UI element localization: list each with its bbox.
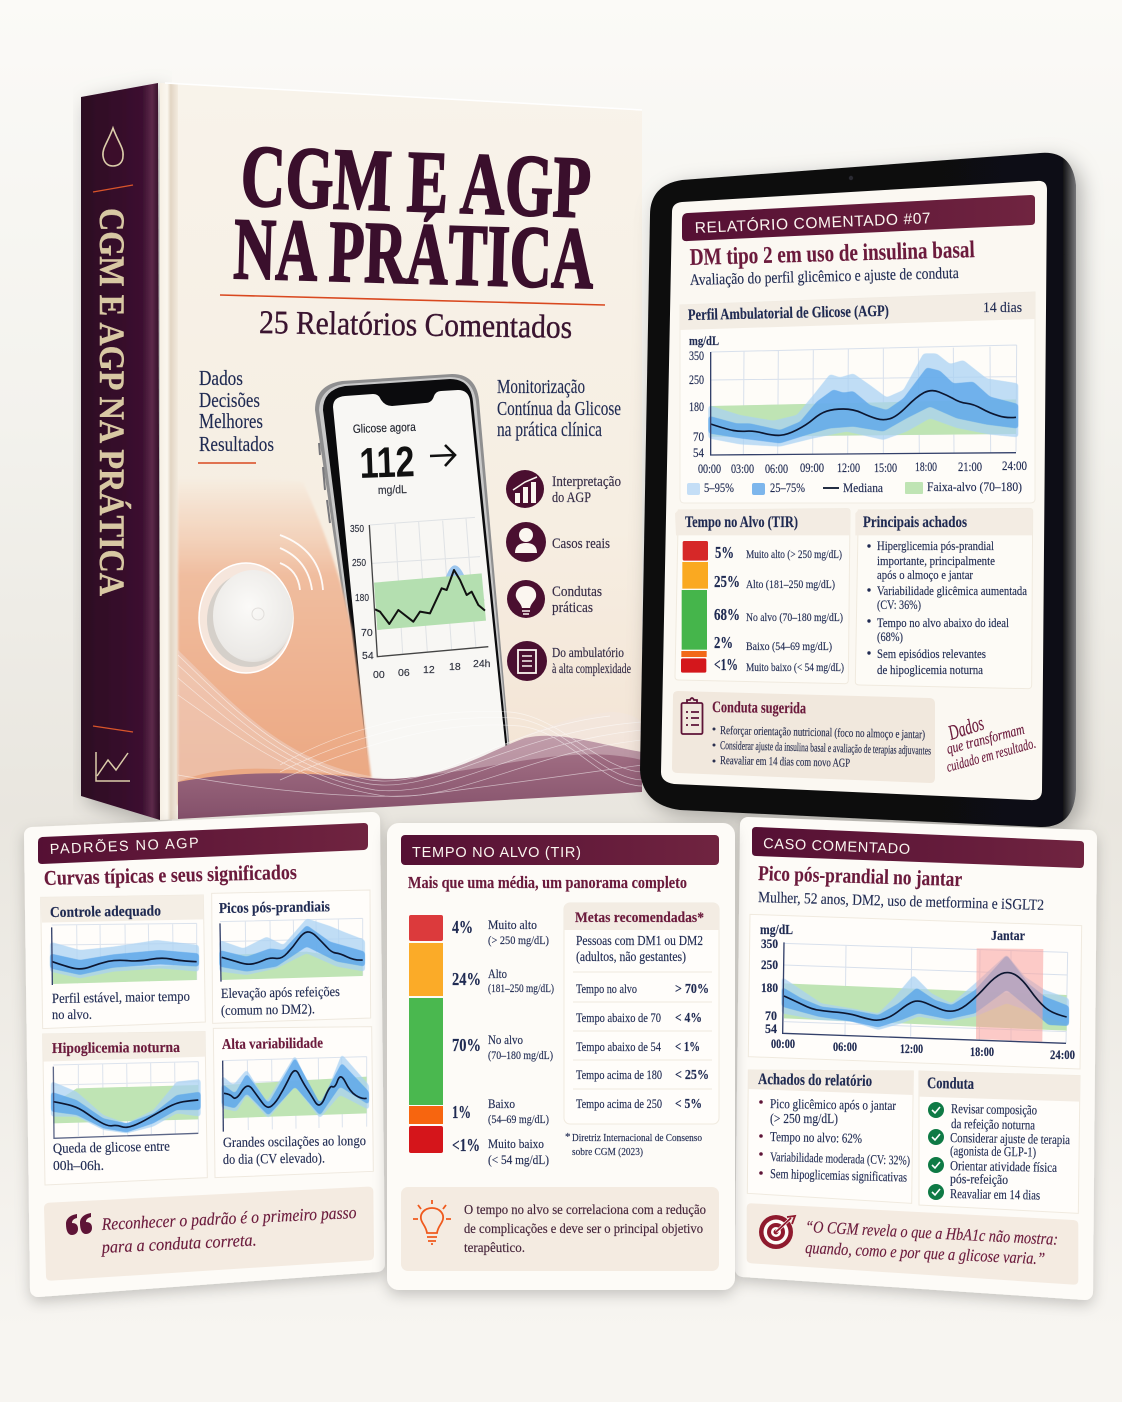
card header banner bbox=[401, 835, 719, 865]
AGP chart: 06:00 bbox=[765, 462, 788, 476]
case findings panel bbox=[747, 1070, 913, 1203]
feature list bbox=[506, 470, 631, 681]
phone chart: 180 bbox=[355, 592, 369, 604]
case quote panel: quando, como e por que a glicose varia.” bbox=[805, 1238, 1045, 1268]
card: case report bbox=[743, 825, 1089, 1292]
case chart panel: 70 bbox=[765, 1009, 777, 1023]
phone chart: 250 bbox=[352, 557, 366, 569]
insight panel bbox=[401, 1187, 719, 1271]
pattern: high variability: do dia (CV elevado). bbox=[223, 1151, 325, 1168]
card header banner bbox=[38, 823, 368, 864]
TIR panel: Muito baixo (< 54 mg/dL) bbox=[746, 660, 844, 674]
phone reading: 112 bbox=[359, 438, 415, 488]
AGP legend: Faixa-alvo (70–180) bbox=[927, 479, 1022, 494]
case conduct panel: da refeição noturna bbox=[951, 1116, 1035, 1132]
TIR values: 4% bbox=[452, 917, 473, 937]
TIR values: Alto bbox=[488, 966, 507, 981]
icon: quotation mark bbox=[66, 1213, 92, 1235]
TIR values: (181–250 mg/dL) bbox=[488, 981, 554, 995]
tablet header banner bbox=[682, 195, 1035, 241]
phone chart: 18 bbox=[449, 661, 461, 673]
cover title: NA PRÁTICA bbox=[232, 201, 595, 308]
TIR panel: 5% bbox=[715, 543, 734, 562]
icon: arrow bbox=[430, 445, 455, 466]
book cover bbox=[160, 83, 642, 820]
TIR stacked bar bbox=[681, 541, 708, 673]
AGP chart: 180 bbox=[689, 400, 704, 414]
suggested conduct panel: Reforçar orientação nutricional (foco no almoço e jantar) bbox=[720, 723, 925, 741]
icon: light bulb bbox=[413, 1200, 451, 1244]
phone chart: 70 bbox=[361, 627, 373, 639]
feature list: práticas bbox=[552, 600, 593, 616]
pattern: post-meal peaks: Picos pós-prandiais bbox=[219, 899, 330, 917]
feature list: do AGP bbox=[552, 490, 591, 506]
insight panel: terapêutico. bbox=[464, 1241, 525, 1256]
TIR values: Muito alto bbox=[488, 917, 537, 932]
findings panel: após o almoço e jantar bbox=[877, 567, 974, 582]
case chart panel: 06:00 bbox=[833, 1040, 857, 1054]
targets panel: Tempo acima de 180 bbox=[576, 1067, 662, 1082]
TIR panel: Tempo no Alvo (TIR) bbox=[685, 514, 798, 531]
targets panel: Pessoas com DM1 ou DM2 bbox=[576, 933, 703, 948]
case quote panel: “O CGM revela o que a HbA1c não mostra: bbox=[805, 1217, 1058, 1249]
feature list: Condutas bbox=[552, 584, 602, 600]
book spine bbox=[81, 83, 160, 820]
footnote: sobre CGM (2023) bbox=[572, 1146, 643, 1158]
tablet bbox=[640, 153, 1076, 827]
targets panel: Tempo acima de 250 bbox=[576, 1096, 662, 1111]
case chart panel: 12:00 bbox=[900, 1042, 923, 1056]
TIR values: (< 54 mg/dL) bbox=[488, 1152, 549, 1167]
phone chart: 00 bbox=[373, 669, 385, 681]
suggested conduct panel: Conduta sugerida bbox=[712, 699, 806, 717]
quote panel: para a conduta correta. bbox=[99, 1229, 257, 1257]
right tagline: na prática clínica bbox=[497, 419, 602, 441]
quote panel bbox=[44, 1187, 374, 1281]
cover title bbox=[232, 128, 595, 308]
case chart panel: 00:00 bbox=[771, 1037, 795, 1051]
findings panel: de hipoglicemia noturna bbox=[877, 662, 983, 677]
phone chart: 06 bbox=[398, 667, 410, 679]
card: AGP patterns bbox=[32, 820, 377, 1289]
case chart panel: 18:00 bbox=[970, 1045, 994, 1059]
pattern: nocturnal hypoglycemia: Hipoglicemia noturna bbox=[52, 1040, 180, 1057]
AGP panel: Perfil Ambulatorial de Glicose (AGP) bbox=[688, 303, 889, 324]
pattern: adequate control bbox=[41, 895, 205, 1029]
case chart panel: 180 bbox=[761, 981, 778, 995]
TIR values: 70% bbox=[452, 1035, 481, 1055]
pattern: adequate control: Perfil estável, maior tempo bbox=[52, 990, 190, 1007]
handwritten note: que transformam bbox=[945, 722, 1026, 758]
TIR panel bbox=[675, 509, 850, 684]
card header banner: TEMPO NO ALVO (TIR) bbox=[412, 845, 581, 861]
card header banner: CASO COMENTADO bbox=[763, 836, 910, 858]
spine title: CGM E AGP NA PRÁTICA bbox=[92, 208, 132, 596]
TIR values: 24% bbox=[452, 969, 481, 989]
targets panel: > 70% bbox=[675, 982, 709, 997]
decorative waves bbox=[178, 650, 642, 819]
tablet frame bbox=[640, 153, 1076, 827]
AGP chart: mg/dL bbox=[689, 333, 719, 348]
handwritten note bbox=[945, 711, 1038, 776]
icon: clipboard bbox=[682, 698, 702, 734]
AGP chart bbox=[689, 333, 1027, 476]
findings panel: Variabilidade glicêmica aumentada bbox=[877, 583, 1027, 598]
sensor bbox=[199, 535, 323, 673]
case chart panel: 350 bbox=[761, 937, 778, 951]
case conduct panel: Considerar ajuste de terapia bbox=[950, 1130, 1070, 1147]
pattern: high variability: Grandes oscilações ao longo bbox=[223, 1134, 366, 1151]
icon: person bbox=[506, 522, 546, 562]
pattern: nocturnal hypoglycemia: 00h–06h. bbox=[53, 1159, 104, 1174]
targets panel: < 1% bbox=[675, 1040, 700, 1055]
phone reading: Glicose agora bbox=[353, 420, 416, 436]
icon: chart bbox=[506, 470, 544, 508]
pattern: adequate control: no alvo. bbox=[52, 1008, 92, 1023]
TIR values: (70–180 mg/dL) bbox=[488, 1048, 553, 1062]
phone chart: 350 bbox=[350, 523, 364, 535]
left tagline bbox=[198, 366, 274, 463]
insight panel: O tempo no alvo se correlaciona com a redução bbox=[464, 1203, 706, 1218]
right tagline: Contínua da Glicose bbox=[497, 398, 621, 420]
targets panel: < 25% bbox=[675, 1068, 709, 1083]
AGP chart: 18:00 bbox=[915, 460, 937, 474]
tablet subtitle: Avaliação do perfil glicêmico e ajuste de conduta bbox=[690, 265, 959, 289]
TIR values: <1% bbox=[452, 1135, 480, 1155]
case quote panel bbox=[747, 1203, 1078, 1285]
TIR panel: 2% bbox=[714, 633, 733, 652]
case findings panel: Sem hipoglicemias significativas bbox=[770, 1166, 907, 1185]
case findings panel: Achados do relatório bbox=[758, 1071, 872, 1090]
pattern: high variability: Alta variabilidade bbox=[222, 1036, 323, 1053]
phone chart: 54 bbox=[362, 650, 374, 662]
cover title: CGM E AGP bbox=[239, 128, 592, 237]
phone chart bbox=[350, 517, 491, 681]
TIR values: Baixo bbox=[488, 1096, 515, 1111]
cover subtitle: 25 Relatórios Comentados bbox=[259, 305, 572, 346]
TIR values: Muito baixo bbox=[488, 1136, 544, 1151]
TIR panel: Alto (181–250 mg/dL) bbox=[746, 577, 835, 591]
targets panel: Tempo no alvo bbox=[576, 981, 637, 996]
card title: Pico pós-prandial no jantar bbox=[758, 861, 962, 891]
handwritten note: Dados bbox=[945, 711, 987, 745]
AGP panel bbox=[680, 292, 1035, 503]
TIR panel: No alvo (70–180 mg/dL) bbox=[746, 610, 843, 624]
arm bbox=[178, 477, 373, 805]
case conduct panel: Conduta bbox=[927, 1075, 974, 1093]
case conduct panel: Reavaliar em 14 dias bbox=[950, 1186, 1040, 1203]
pattern: nocturnal hypoglycemia bbox=[43, 1032, 207, 1185]
findings panel: Principais achados bbox=[863, 514, 967, 531]
case conduct panel: Orientar atividade física bbox=[950, 1158, 1057, 1175]
findings panel: Hiperglicemia pós-prandial bbox=[877, 538, 994, 553]
pattern: post-meal peaks: (comum no DM2). bbox=[221, 1002, 315, 1019]
signal arcs bbox=[280, 535, 323, 590]
targets panel: Tempo abaixo de 70 bbox=[576, 1010, 661, 1025]
book bbox=[81, 83, 642, 820]
phone reading: mg/dL bbox=[378, 484, 408, 497]
icon: drop on spine bbox=[103, 128, 123, 166]
findings panel: (CV: 36%) bbox=[877, 597, 921, 612]
card: time in range bbox=[387, 823, 735, 1290]
AGP legend bbox=[687, 479, 1022, 495]
insight panel: de complicações e deve ser o principal objetivo bbox=[464, 1222, 703, 1237]
pattern: post-meal peaks bbox=[212, 890, 371, 1023]
AGP chart: 250 bbox=[689, 373, 704, 387]
suggested conduct panel: Reavaliar em 14 dias com novo AGP bbox=[720, 753, 850, 770]
card title: Mais que uma média, um panorama completo bbox=[408, 873, 687, 892]
TIR values: (54–69 mg/dL) bbox=[488, 1112, 549, 1126]
suggested conduct panel: Considerar ajuste da insulina basal e avaliação de terapias adjuvantes bbox=[720, 738, 931, 758]
footnote bbox=[565, 1131, 702, 1158]
TIR panel: Baixo (54–69 mg/dL) bbox=[746, 639, 832, 653]
case findings panel: Pico glicêmico após o jantar bbox=[770, 1096, 897, 1113]
targets panel: Metas recomendadas* bbox=[575, 910, 704, 926]
case findings panel: Variabilidade moderada (CV: 32%) bbox=[770, 1149, 910, 1168]
AGP chart: 12:00 bbox=[837, 461, 860, 475]
card header banner: PADRÕES NO AGP bbox=[49, 835, 199, 858]
case chart panel: Jantar bbox=[991, 929, 1025, 944]
feature list: Interpretação bbox=[552, 474, 621, 490]
case findings panel: (> 250 mg/dL) bbox=[770, 1111, 838, 1126]
left tagline: Melhores bbox=[199, 409, 263, 433]
TIR values bbox=[452, 917, 554, 1167]
targets panel bbox=[564, 903, 719, 1124]
TIR panel: <1% bbox=[714, 655, 738, 674]
TIR panel: 68% bbox=[714, 605, 740, 624]
feature list: à alta complexidade bbox=[552, 662, 631, 677]
pattern: nocturnal hypoglycemia: Queda de glicose entre bbox=[53, 1140, 170, 1157]
phone chart: 12 bbox=[423, 664, 435, 676]
footnote: * bbox=[565, 1131, 570, 1143]
TIR stacked bar bbox=[409, 915, 443, 1153]
AGP chart: 09:00 bbox=[800, 461, 824, 475]
phone chart: 24h bbox=[473, 658, 491, 670]
case conduct panel: pós-refeição bbox=[950, 1171, 1008, 1187]
case conduct panel bbox=[919, 1071, 1080, 1213]
case chart panel: 250 bbox=[761, 958, 778, 972]
AGP chart: 21:00 bbox=[958, 460, 982, 474]
TIR panel: Muito alto (> 250 mg/dL) bbox=[746, 547, 842, 561]
card header banner bbox=[752, 827, 1084, 868]
AGP legend: 5–95% bbox=[704, 480, 734, 495]
pattern: high variability bbox=[213, 1027, 373, 1178]
AGP chart: 70 bbox=[693, 430, 704, 444]
case chart panel: mg/dL bbox=[760, 923, 793, 938]
AGP legend: 25–75% bbox=[770, 480, 805, 495]
case conduct panel: Revisar composição bbox=[951, 1101, 1037, 1118]
findings panel: importante, principalmente bbox=[877, 553, 995, 568]
AGP chart: 15:00 bbox=[874, 461, 897, 475]
AGP chart: 00:00 bbox=[698, 462, 721, 476]
TIR values: (> 250 mg/dL) bbox=[488, 933, 549, 947]
AGP panel: 14 dias bbox=[983, 300, 1022, 316]
feature list: Casos reais bbox=[552, 536, 610, 552]
icon: light bulb bbox=[507, 580, 545, 618]
case chart panel bbox=[748, 914, 1082, 1069]
findings panel bbox=[855, 508, 1033, 689]
phone reading bbox=[353, 420, 455, 497]
right tagline: Monitorização bbox=[497, 376, 585, 398]
suggested conduct panel bbox=[672, 691, 935, 783]
icon: document bbox=[507, 641, 547, 681]
case conduct panel: (agonista de GLP-1) bbox=[950, 1143, 1036, 1160]
left tagline: Decisões bbox=[199, 388, 260, 412]
quote panel: Reconhecer o padrão é o primeiro passo bbox=[100, 1202, 357, 1234]
case chart panel: 24:00 bbox=[1050, 1048, 1075, 1062]
tablet title: DM tipo 2 em uso de insulina basal bbox=[689, 237, 975, 271]
phone bbox=[315, 374, 511, 795]
targets panel: < 5% bbox=[675, 1097, 702, 1112]
icon: chart on spine bbox=[96, 752, 130, 781]
feature list: Do ambulatório bbox=[552, 646, 624, 661]
targets panel: Tempo abaixo de 54 bbox=[576, 1039, 661, 1054]
icon: checks bbox=[928, 1102, 944, 1200]
targets panel: < 4% bbox=[675, 1011, 702, 1026]
AGP chart: 24:00 bbox=[1002, 459, 1027, 473]
findings panel: (68%) bbox=[877, 629, 903, 644]
card title: Curvas típicas e seus significados bbox=[44, 860, 297, 890]
tablet header banner: RELATÓRIO COMENTADO #07 bbox=[694, 210, 931, 237]
handwritten note: cuidado em resultado. bbox=[945, 736, 1038, 776]
icon: target bbox=[759, 1215, 795, 1249]
AGP legend: Mediana bbox=[843, 480, 883, 495]
left tagline: Dados bbox=[199, 366, 243, 390]
TIR values: 1% bbox=[452, 1102, 471, 1122]
AGP chart: 03:00 bbox=[731, 462, 754, 476]
AGP chart: 54 bbox=[693, 446, 705, 460]
pattern: post-meal peaks: Elevação após refeições bbox=[221, 985, 340, 1002]
case findings panel: Tempo no alvo: 62% bbox=[770, 1129, 862, 1146]
pattern: adequate control: Controle adequado bbox=[50, 903, 161, 921]
case chart panel: 54 bbox=[765, 1022, 778, 1036]
targets panel: (adultos, não gestantes) bbox=[576, 949, 686, 964]
right tagline bbox=[497, 376, 621, 441]
findings panel: Tempo no alvo abaixo do ideal bbox=[877, 615, 1009, 630]
TIR panel: 25% bbox=[714, 572, 740, 591]
left tagline: Resultados bbox=[199, 432, 274, 456]
TIR values: No alvo bbox=[488, 1032, 523, 1047]
card subtitle: Mulher, 52 anos, DM2, uso de metformina e iSGLT2 bbox=[758, 889, 1044, 914]
findings panel: Sem episódios relevantes bbox=[877, 646, 986, 661]
AGP chart: 350 bbox=[689, 349, 704, 363]
footnote: Diretriz Internacional de Consenso bbox=[572, 1132, 702, 1144]
